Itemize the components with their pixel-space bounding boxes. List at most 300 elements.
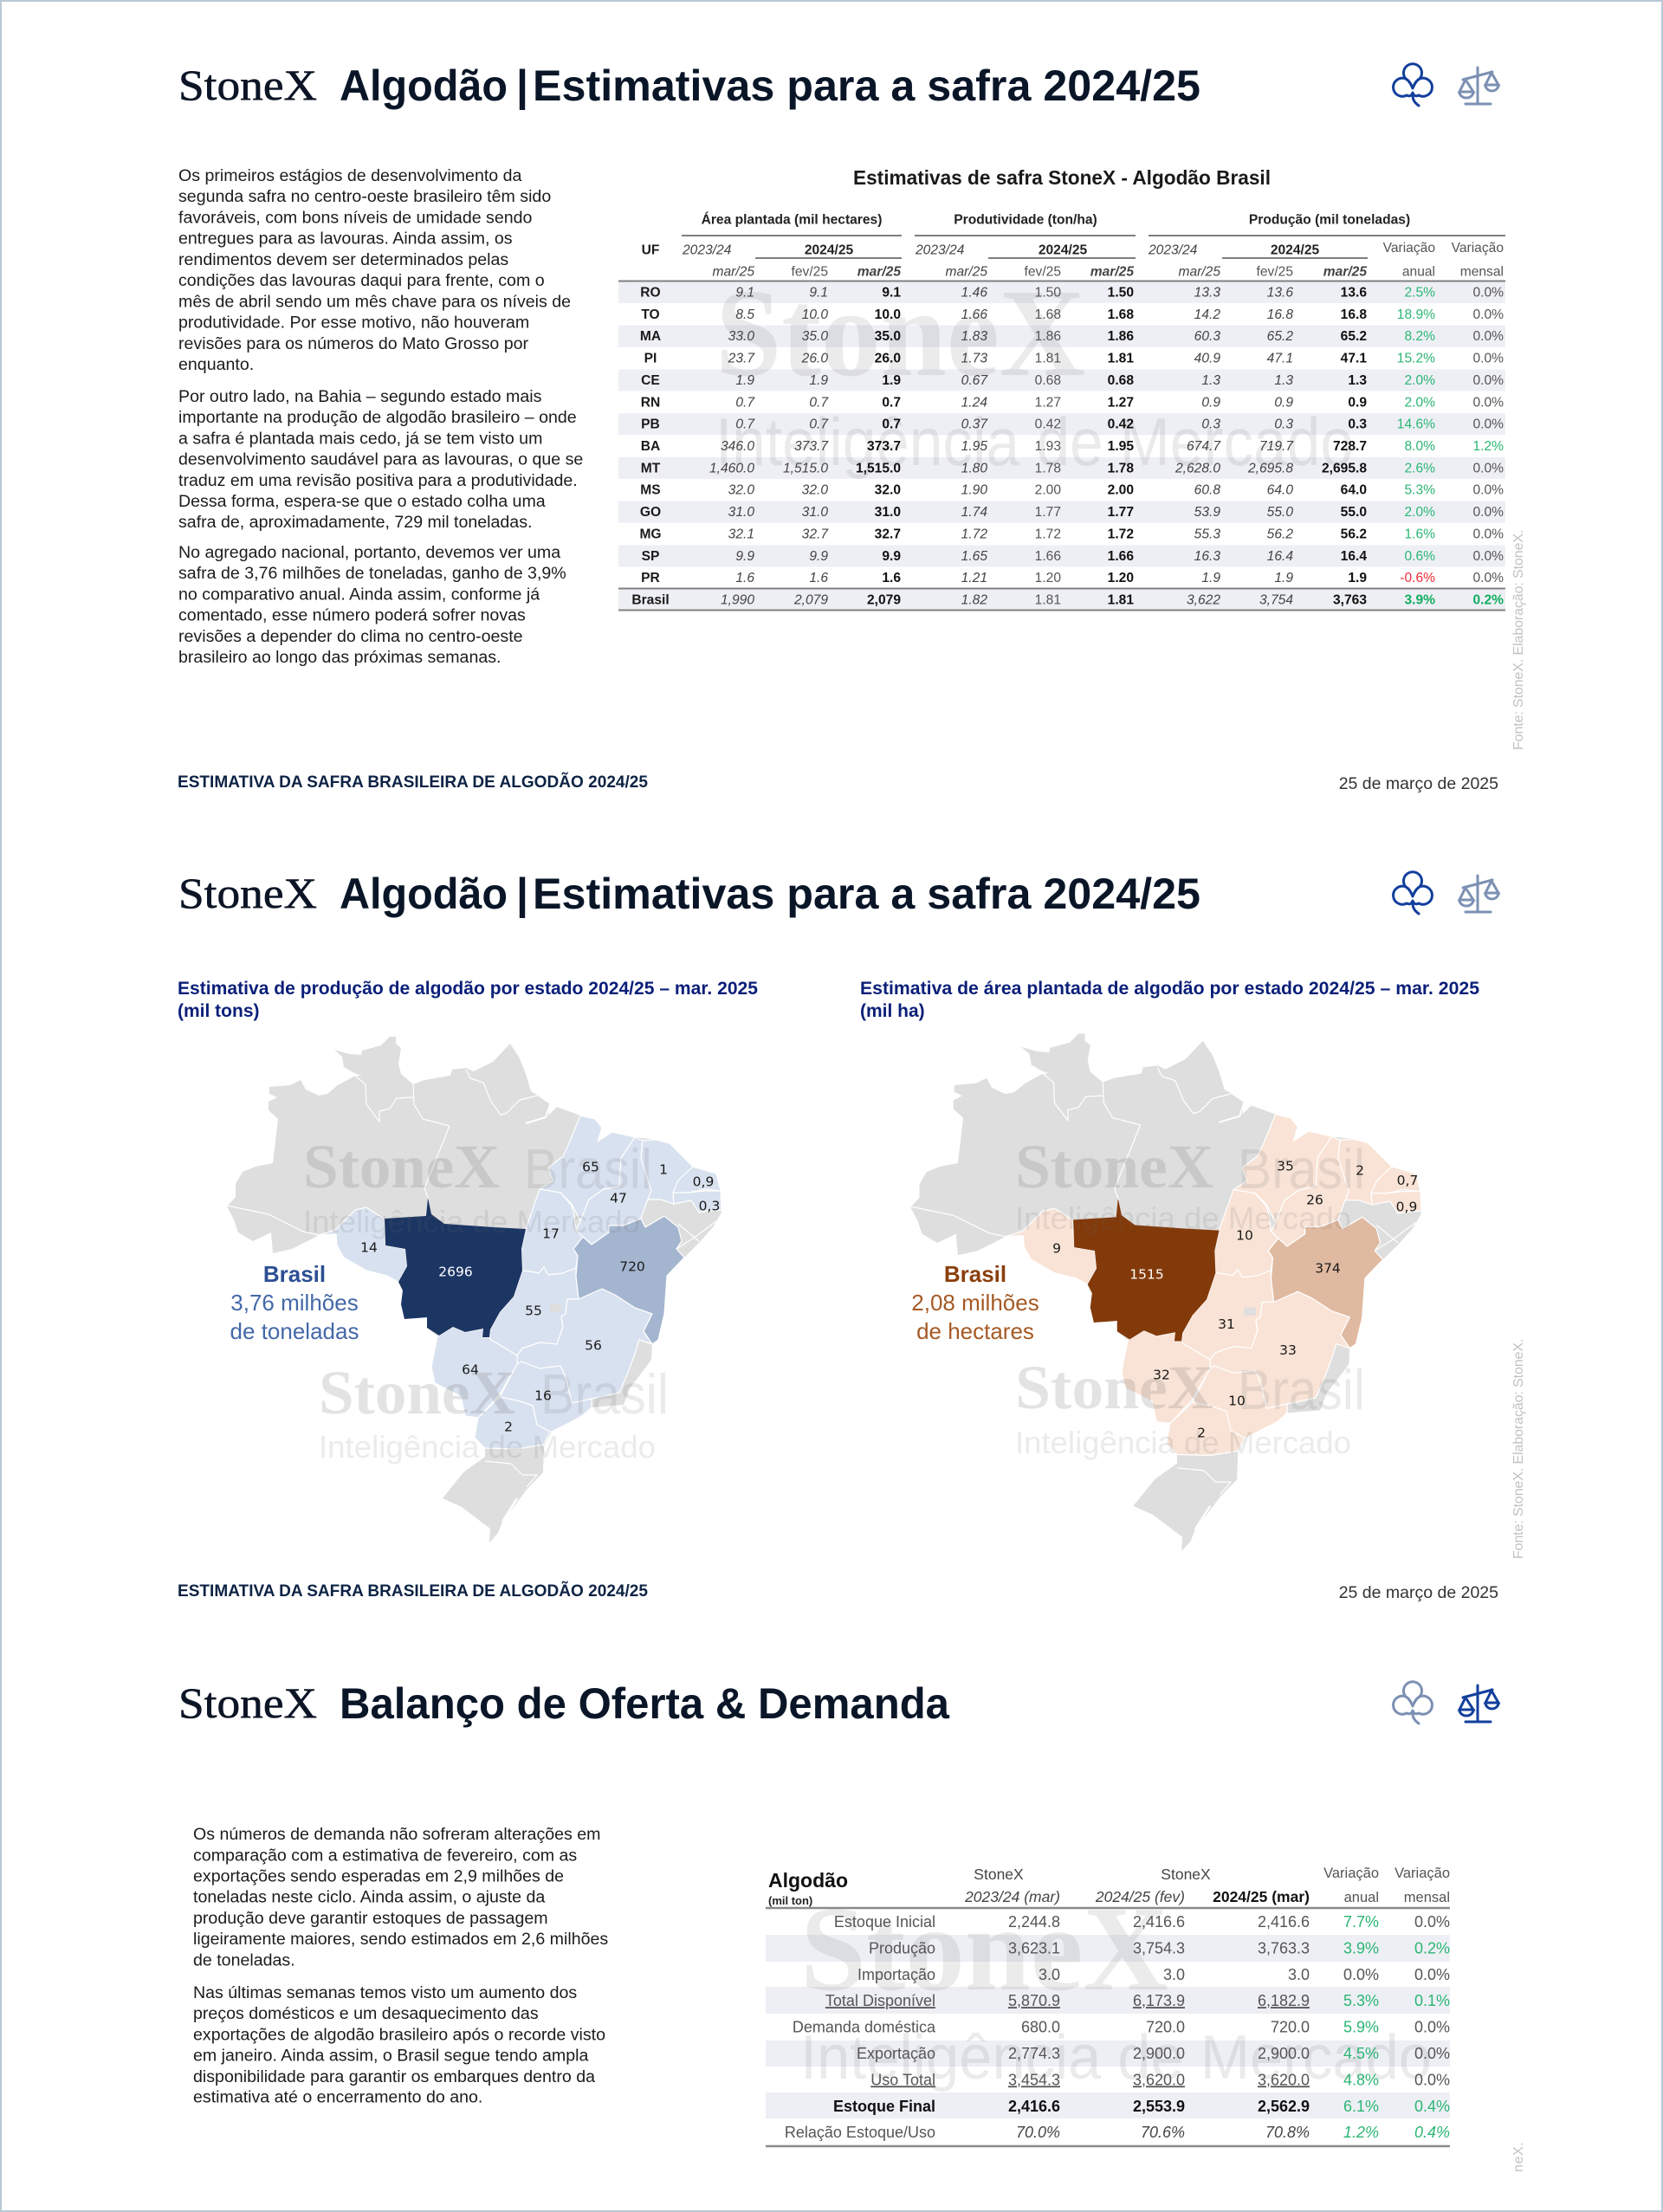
row BA: 373.7 <box>867 439 901 454</box>
row MT <box>641 461 1504 475</box>
row Estoque Inicial: 7.7% <box>1343 1913 1379 1931</box>
row MG: 55.3 <box>1194 527 1220 542</box>
watermark: Inteligência de Mercado <box>1015 1200 1351 1236</box>
row RN: 0.7 <box>882 395 901 410</box>
row SP: 9.9 <box>882 549 901 564</box>
callout: Brasil area: 2,08 milhões <box>911 1290 1039 1316</box>
row PI: 26.0 <box>801 352 828 366</box>
row MS: 64.0 <box>1267 483 1293 498</box>
watermark: Inteligência de Mercado <box>319 1429 656 1465</box>
row PI <box>644 352 1504 366</box>
row SP <box>642 549 1504 564</box>
watermark: StoneX <box>319 1358 515 1427</box>
row Relação Estoque/Uso: 70.8% <box>1265 2124 1310 2141</box>
row Exportação: Exportação <box>857 2045 935 2062</box>
row MT: 1,460.0 <box>709 461 754 475</box>
state values: 56 <box>585 1337 602 1353</box>
state values: 31 <box>1218 1316 1235 1332</box>
row PB: 0.37 <box>961 417 988 432</box>
watermark: Inteligência de Mercado <box>1015 1425 1351 1460</box>
state values <box>1052 1159 1418 1441</box>
row RO: 9.1 <box>882 286 901 300</box>
row Produção: 3,763.3 <box>1258 1939 1310 1957</box>
row RN: 1.24 <box>961 395 987 410</box>
row PI: 40.9 <box>1194 352 1220 366</box>
text block: section 3: produção deve garantir estoques de passagem <box>193 1909 548 1928</box>
row PB: 0.7 <box>809 417 829 432</box>
row MS: 60.8 <box>1194 483 1220 498</box>
row GO: 1.74 <box>961 505 987 520</box>
row MS: 32.0 <box>875 483 901 498</box>
row Brasil: 0.2% <box>1472 592 1504 608</box>
row Estoque Inicial: 2,244.8 <box>1008 1913 1060 1931</box>
row MA: 65.2 <box>1267 329 1293 344</box>
row Total Disponível: 5.3% <box>1343 1992 1379 2009</box>
state values: 35 <box>1277 1159 1294 1174</box>
row Brasil: 1.82 <box>961 592 987 608</box>
column group headings: Produtividade (ton/ha) <box>954 213 1097 227</box>
row RN <box>641 395 1504 410</box>
row MA: 1.86 <box>1108 329 1134 344</box>
row MA: 35.0 <box>802 329 828 344</box>
row PB: 0.3 <box>1348 417 1367 432</box>
footer 1: 25 de março de 2025 <box>1339 774 1498 793</box>
logo: StoneX <box>178 1678 317 1727</box>
text block: section 1: condições das lavouras daqui para frente, com o <box>178 271 545 290</box>
row Importação: 3.0 <box>1039 1966 1060 1983</box>
header <box>768 1866 1450 1907</box>
row GO: GO <box>640 505 661 520</box>
row bands <box>766 1935 1450 2118</box>
row RO: 13.6 <box>1341 286 1367 300</box>
row PB: 0.7 <box>735 417 755 432</box>
row RO: 1.50 <box>1035 286 1061 300</box>
row RO: 13.6 <box>1267 286 1293 300</box>
row RO: RO <box>640 286 661 300</box>
row Uso Total: 0.0% <box>1414 2071 1450 2088</box>
text block: section 3 <box>193 1825 608 2106</box>
row PR: PR <box>641 571 660 585</box>
row PI: 47.1 <box>1267 352 1293 366</box>
text block: section 3: Nas últimas semanas temos visto um aumento dos <box>193 1983 577 2002</box>
row MS <box>640 483 1504 498</box>
header: Variação <box>1394 1866 1450 1881</box>
callout: Brasil area: Brasil <box>944 1261 1006 1287</box>
column group headings: mar/25 <box>1178 265 1220 279</box>
row PR: 1.6 <box>735 571 754 585</box>
row SP: 16.4 <box>1267 549 1293 564</box>
column group headings: 2023/24 <box>1148 243 1198 258</box>
heading: area map: Estimativa de área plantada de algodão por estado 2024/25 – mar. 2025 <box>860 979 1479 999</box>
row PI: 26.0 <box>875 352 901 366</box>
row CE: 1.3 <box>1201 373 1220 388</box>
state values: 2 <box>1356 1162 1364 1178</box>
row Demanda doméstica: Demanda doméstica <box>793 2019 936 2036</box>
row MA: 33.0 <box>728 329 754 344</box>
row PB: 0.42 <box>1108 417 1134 432</box>
column group headings: Área plantada (mil hectares) <box>702 211 882 227</box>
column group headings: 2024/25 <box>1271 243 1320 258</box>
row PI: 23.7 <box>728 352 755 366</box>
row TO <box>641 307 1504 322</box>
row CE: 1.9 <box>735 373 754 388</box>
row GO: 31.0 <box>728 505 754 520</box>
row TO: 10.0 <box>802 307 828 322</box>
text block: section 1: revisões para os números do Mato Grosso por <box>178 334 529 353</box>
row MG: 56.2 <box>1341 527 1367 542</box>
row MT: 1,515.0 <box>783 461 828 475</box>
row MS: 1.90 <box>961 483 987 498</box>
source note 3: neX. <box>1511 2142 1526 2172</box>
row MG: 1.6% <box>1404 527 1435 542</box>
row TO: 1.68 <box>1035 307 1061 322</box>
row RO: 9.1 <box>735 286 754 300</box>
row PB: 0.7 <box>882 417 901 432</box>
row RN: 1.27 <box>1108 395 1134 410</box>
row MG: MG <box>639 527 662 542</box>
row MA: MA <box>640 329 661 344</box>
row PI: 1.81 <box>1108 352 1134 366</box>
state values <box>360 1159 720 1434</box>
header: 2024/25 (mar) <box>1213 1888 1310 1905</box>
logo: StoneX <box>178 61 317 109</box>
icon: cotton active <box>1394 64 1432 106</box>
row GO: 55.0 <box>1267 505 1293 520</box>
heading: production map: Estimativa de produção de algodão por estado 2024/25 – mar. 2025 <box>178 979 758 999</box>
row PI: 1.81 <box>1035 352 1061 366</box>
row Brasil: 1,990 <box>721 592 754 608</box>
row CE: 0.0% <box>1472 373 1504 388</box>
title: Algodão <box>340 61 508 110</box>
row bands <box>618 281 1505 610</box>
row MS: 2.00 <box>1108 483 1134 498</box>
row BA: 674.7 <box>1187 439 1221 454</box>
row BA: 346.0 <box>721 439 754 454</box>
text block: section 1: No agregado nacional, portanto, devemos ver uma <box>178 543 560 562</box>
row Brasil <box>631 592 1504 608</box>
map: planted area by state <box>910 1034 1421 1551</box>
text block: section 1: enquanto. <box>178 355 254 374</box>
callout: Brasil area: de hectares <box>916 1318 1034 1344</box>
column group headings: anual <box>1402 265 1435 279</box>
row Importação: 0.0% <box>1414 1966 1450 1983</box>
row PR: -0.6% <box>1400 571 1435 585</box>
row PR: 1.6 <box>809 571 828 585</box>
column group headings: 2023/24 <box>915 243 965 258</box>
text block: section 1: entregues para as lavouras. Ainda assim, os <box>178 230 513 249</box>
text block: section 3: exportações de algodão brasileiro após o recorde visto <box>193 2025 605 2044</box>
row PR: 1.6 <box>882 571 901 585</box>
callout: Brasil production: 3,76 milhões <box>230 1290 359 1316</box>
row RN: RN <box>641 395 660 410</box>
column group headings: 2024/25 <box>805 243 854 258</box>
row MG: 1.72 <box>1035 527 1061 542</box>
text block: section 1: safra de, aproximadamente, 729 mil toneladas. <box>178 513 532 532</box>
table: balanço de oferta e demanda <box>766 1866 1450 2146</box>
row PR: 1.9 <box>1274 571 1293 585</box>
column group headings: 2024/25 <box>1039 243 1088 258</box>
row RN: 0.0% <box>1472 395 1504 410</box>
header: 2023/24 (mar) <box>964 1888 1060 1905</box>
row Relação Estoque/Uso: 70.0% <box>1016 2124 1060 2141</box>
row PR: 1.21 <box>961 571 987 585</box>
column group headings: mar/25 <box>1323 265 1367 279</box>
row MG: 56.2 <box>1267 527 1293 542</box>
text block: section 1: a safra é plantada mais cedo, já se tem visto um <box>178 429 542 448</box>
row PB: 14.6% <box>1397 417 1435 432</box>
state values: 33 <box>1279 1342 1297 1358</box>
row MG: 1.72 <box>1108 527 1134 542</box>
header: 2024/25 (fev) <box>1095 1888 1185 1905</box>
row Demanda doméstica: 680.0 <box>1021 2019 1060 2036</box>
row RO: 2.5% <box>1404 286 1435 300</box>
state values: 2 <box>504 1419 513 1434</box>
row GO: 31.0 <box>802 505 828 520</box>
row PI: 1.73 <box>961 352 987 366</box>
header: mensal <box>1404 1890 1450 1905</box>
text block: section 1: desenvolvimento saudável para as lavouras, o que se <box>178 450 583 469</box>
row SP: 1.65 <box>961 549 987 564</box>
watermark <box>1015 1132 1365 1460</box>
row MT: MT <box>641 461 661 475</box>
title: Balanço de Oferta & Demanda <box>340 1679 950 1728</box>
text block: section 1: favoráveis, com bons níveis de umidade sendo <box>178 208 533 227</box>
row MS: 64.0 <box>1341 483 1367 498</box>
row Relação Estoque/Uso: 0.4% <box>1414 2124 1450 2141</box>
column group headings: mar/25 <box>945 265 987 279</box>
row Uso Total: Uso Total <box>870 2071 935 2088</box>
row CE: 2.0% <box>1404 373 1435 388</box>
row Brasil: Brasil <box>631 592 670 608</box>
row CE: 0.67 <box>961 373 988 388</box>
row GO <box>640 505 1504 520</box>
column group headings: Variação <box>1452 241 1504 255</box>
row RN: 0.7 <box>809 395 829 410</box>
text block: section 3: preços domésticos e um desaquecimento das <box>193 2004 539 2023</box>
row CE: 1.3 <box>1348 373 1367 388</box>
text block: section 1: Os primeiros estágios de desenvolvimento da <box>178 166 522 185</box>
state values: 0,9 <box>693 1174 714 1190</box>
row Brasil: 1.81 <box>1035 592 1061 608</box>
row GO: 1.77 <box>1035 505 1061 520</box>
row Uso Total: 3,620.0 <box>1258 2071 1310 2088</box>
state values: 1515 <box>1129 1266 1164 1282</box>
table: estimativas de safra <box>618 166 1505 610</box>
row Total Disponível: 6,173.9 <box>1133 1992 1185 2009</box>
header: (mil ton) <box>768 1894 812 1907</box>
watermark: Brasil <box>540 1362 669 1426</box>
text block: section 1: rendimentos devem ser determinados pelas <box>178 250 508 269</box>
text block: section 1: importante na produção de algodão brasileiro – onde <box>178 408 577 427</box>
row PB: 0.3 <box>1201 417 1220 432</box>
row PI: 47.1 <box>1341 352 1367 366</box>
row MT: 1.78 <box>1108 461 1134 475</box>
column group headings: mar/25 <box>857 265 901 279</box>
watermark <box>303 1132 669 1465</box>
row BA: BA <box>641 439 660 454</box>
row MA: 60.3 <box>1194 329 1220 344</box>
column group headings: fev/25 <box>792 265 828 279</box>
row RN: 2.0% <box>1404 395 1435 410</box>
row Exportação: 2,900.0 <box>1258 2045 1310 2062</box>
row MG: 0.0% <box>1472 527 1504 542</box>
section 2 header <box>178 869 1200 919</box>
source note 2: Fonte: StoneX. Elaboração: StoneX. <box>1511 1338 1526 1559</box>
watermark: Brasil <box>1238 1137 1365 1200</box>
row RO <box>640 286 1504 300</box>
row BA: 1.95 <box>1108 439 1134 454</box>
row BA: 728.7 <box>1333 439 1367 454</box>
callout: Brasil production <box>230 1261 359 1344</box>
row Brasil: 3,622 <box>1187 592 1220 608</box>
row MG <box>639 527 1504 542</box>
row SP: 9.9 <box>735 549 754 564</box>
row Brasil: 2,079 <box>867 592 901 608</box>
row GO: 1.77 <box>1108 505 1134 520</box>
state values: 10 <box>1236 1228 1253 1244</box>
row RO: 1.46 <box>961 286 987 300</box>
watermark: StoneX <box>303 1132 500 1201</box>
text block: section 1: comentado, esse número poderá sofrer novas <box>178 606 526 625</box>
row Estoque Final: 2,416.6 <box>1008 2098 1060 2115</box>
row Total Disponível: 5,870.9 <box>1008 1992 1060 2009</box>
row Exportação: 4.5% <box>1343 2045 1379 2062</box>
row Importação: 0.0% <box>1343 1966 1379 1983</box>
row MT: 1,515.0 <box>856 461 901 475</box>
text block: section 1: no comparativo anual. Ainda assim, conforme já <box>178 585 540 604</box>
text block: section 1: Por outro lado, na Bahia – segundo estado mais <box>178 387 542 406</box>
row MT: 2.6% <box>1404 461 1435 475</box>
row CE: 0.68 <box>1035 373 1061 388</box>
row Estoque Final: 6.1% <box>1343 2098 1379 2115</box>
row MG: 1.72 <box>961 527 987 542</box>
row TO: 1.66 <box>961 307 987 322</box>
row GO: 31.0 <box>875 505 901 520</box>
row TO: 18.9% <box>1397 307 1435 322</box>
row MS: MS <box>640 483 661 498</box>
watermark: Brasil <box>524 1137 652 1200</box>
row TO: 16.8 <box>1267 307 1293 322</box>
row TO: 14.2 <box>1194 307 1220 322</box>
watermark: StoneX <box>1015 1353 1213 1422</box>
callout: Brasil area <box>911 1261 1039 1344</box>
header: Variação <box>1323 1866 1379 1881</box>
row MA <box>640 329 1504 344</box>
row BA: 1.2% <box>1472 439 1504 454</box>
row RN: 0.7 <box>735 395 755 410</box>
row Exportação: 2,774.3 <box>1008 2045 1060 2062</box>
row Produção: 3,623.1 <box>1008 1939 1060 1957</box>
row Demanda doméstica: 5.9% <box>1343 2019 1379 2036</box>
state values: 64 <box>462 1361 479 1377</box>
row MT: 1.80 <box>961 461 987 475</box>
state values: 0,9 <box>1396 1199 1417 1214</box>
row PI: 0.0% <box>1472 352 1504 366</box>
text block: section 3: exportações sendo esperadas em 2,9 milhões de <box>193 1867 564 1886</box>
text block: section 1: traduz em uma revisão positiva para a produtividade. <box>178 471 578 490</box>
row Demanda doméstica: 720.0 <box>1271 2019 1310 2036</box>
row PR: 1.20 <box>1108 571 1134 585</box>
row PB: PB <box>641 417 660 432</box>
callout: Brasil production: Brasil <box>263 1261 326 1287</box>
row BA: 1.95 <box>961 439 987 454</box>
text block: section 1: safra de 3,76 milhões de toneladas, ganho de 3,9% <box>178 564 566 583</box>
row MG: 32.7 <box>875 527 901 542</box>
row BA: 373.7 <box>794 439 829 454</box>
row CE: CE <box>641 373 660 388</box>
heading: area map <box>860 979 1479 1021</box>
header: StoneX <box>1161 1866 1211 1883</box>
watermark: StoneX <box>800 1882 1168 2016</box>
row Estoque Inicial: Estoque Inicial <box>834 1913 935 1931</box>
row PR: 1.20 <box>1035 571 1061 585</box>
row MA: 1.86 <box>1035 329 1061 344</box>
row BA: 1.93 <box>1035 439 1061 454</box>
watermark: StoneX <box>1015 1132 1213 1201</box>
row TO: 8.5 <box>735 307 754 322</box>
row Relação Estoque/Uso: Relação Estoque/Uso <box>785 2124 935 2141</box>
icon: scale active <box>1459 1685 1498 1722</box>
row SP: SP <box>642 549 659 564</box>
header: anual <box>1344 1890 1379 1905</box>
state shapes <box>227 1037 721 1543</box>
row RN: 0.9 <box>1274 395 1293 410</box>
row MT: 0.0% <box>1472 461 1504 475</box>
row MA: 8.2% <box>1404 329 1435 344</box>
row Brasil: 3,754 <box>1259 592 1293 608</box>
row BA <box>641 439 1504 454</box>
state values: 47 <box>610 1190 627 1206</box>
row CE: 0.68 <box>1108 373 1134 388</box>
table title: Estimativas de safra StoneX - Algodão Brasil <box>853 166 1271 189</box>
state values: 0,7 <box>1397 1173 1418 1188</box>
column group headings: Variação <box>1383 241 1435 255</box>
row Brasil: 1.81 <box>1108 592 1134 608</box>
text block: section 3: estimativa até o encerramento do ano. <box>193 2087 482 2106</box>
row Estoque Inicial: 2,416.6 <box>1133 1913 1185 1931</box>
column group headings: Produção (mil toneladas) <box>1249 213 1410 227</box>
row PR: 0.0% <box>1472 571 1504 585</box>
row TO: 16.8 <box>1341 307 1367 322</box>
row RO: 9.1 <box>809 286 828 300</box>
row TO: TO <box>641 307 660 322</box>
section 3 header <box>178 1678 950 1728</box>
row MG: 32.1 <box>728 527 754 542</box>
footer 1 <box>178 773 1498 793</box>
column group headings: fev/25 <box>1025 265 1061 279</box>
state values: 17 <box>542 1226 560 1242</box>
row PI: 15.2% <box>1397 352 1435 366</box>
row PR: 1.9 <box>1348 571 1367 585</box>
text block: section 3: toneladas neste ciclo. Ainda assim, o ajuste da <box>193 1888 545 1907</box>
column group headings: mar/25 <box>712 265 754 279</box>
logo: StoneX <box>178 869 317 917</box>
title: | <box>516 61 528 111</box>
row Estoque Final: Estoque Final <box>833 2098 935 2115</box>
column group headings <box>642 211 1504 279</box>
row TO: 10.0 <box>875 307 901 322</box>
state values: 26 <box>1306 1192 1323 1207</box>
icon: cotton active <box>1394 872 1432 914</box>
row MS: 32.0 <box>728 483 754 498</box>
row BA: 8.0% <box>1404 439 1435 454</box>
text block: section 1: Dessa forma, espera-se que o estado colha uma <box>178 492 546 511</box>
text block: section 3: disponibilidade para garantir os embarques dentro da <box>193 2067 595 2086</box>
row MT: 1.78 <box>1035 461 1061 475</box>
row Importação: Importação <box>857 1966 935 1983</box>
row Uso Total: 3,620.0 <box>1133 2071 1185 2088</box>
header: StoneX <box>974 1866 1024 1883</box>
